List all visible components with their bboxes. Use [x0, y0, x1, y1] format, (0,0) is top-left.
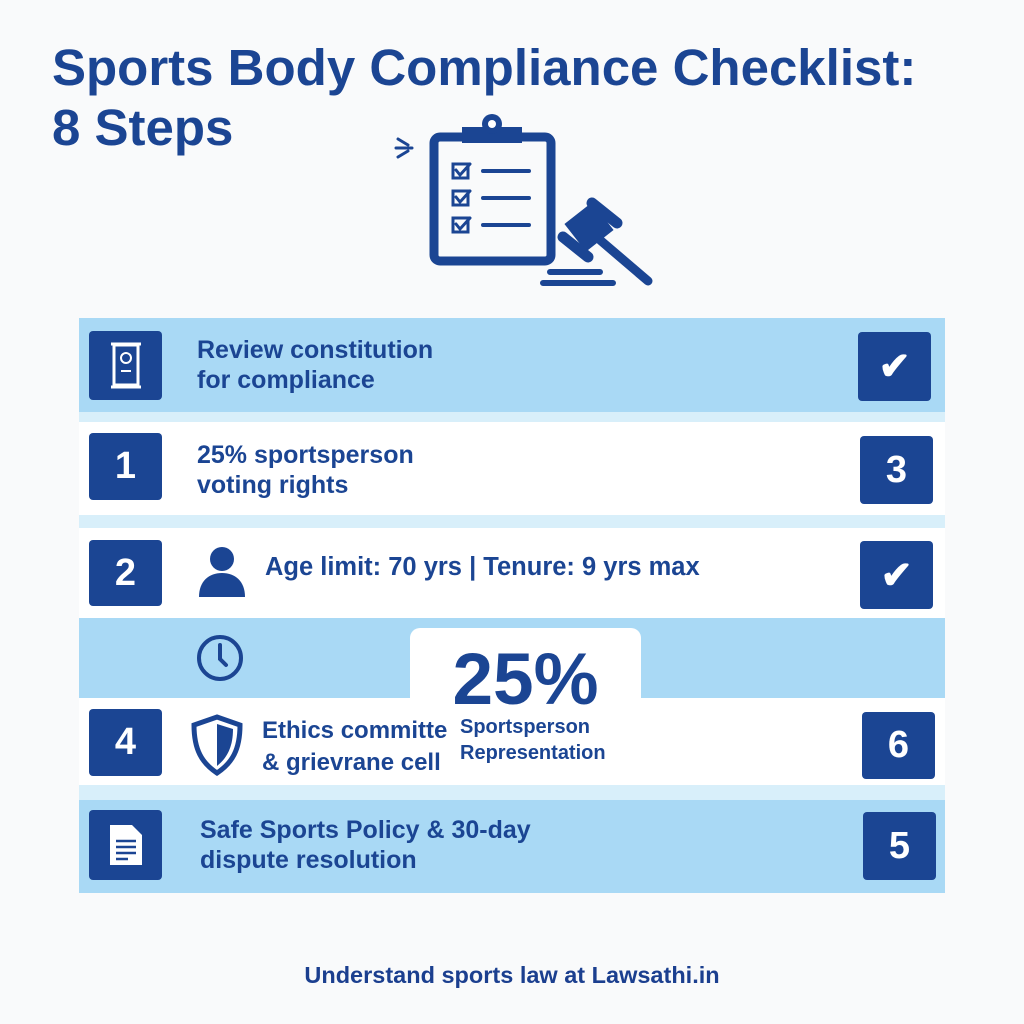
icon: person: [199, 547, 245, 597]
step 1: 1: [115, 445, 136, 487]
callout: 25% representation: Representation: [460, 742, 606, 764]
text: safe sports: Safe Sports Policy & 30-day: [200, 816, 531, 844]
step 4: 4: [115, 721, 136, 763]
callout: 25% representation: 25%: [452, 639, 599, 720]
title: 8 Steps: [52, 99, 233, 156]
step 2: 2: [115, 552, 136, 594]
step 6: 6: [888, 724, 909, 766]
icon: document: [89, 810, 162, 880]
icon: constitution document: [89, 331, 162, 400]
footer: Understand sports law at Lawsathi.in: [304, 962, 720, 988]
text: safe sports: [200, 816, 531, 874]
icon: clock: [197, 635, 243, 681]
step 1: [89, 433, 162, 500]
step 6: [862, 712, 935, 779]
text: voting rights: 25% sportsperson: [197, 441, 414, 469]
icon: check 2: ✔: [881, 554, 912, 596]
text: review constitution: Review constitution: [197, 336, 433, 364]
text: review constitution: [197, 336, 433, 394]
icon: check 1: ✔: [879, 346, 910, 388]
icon: check 1: [858, 332, 931, 401]
title: [52, 39, 916, 156]
icon: clipboard and gavel: [394, 114, 652, 286]
text: safe sports: dispute resolution: [200, 846, 417, 874]
callout: 25% representation: [410, 628, 641, 768]
step 5: [863, 812, 936, 880]
text: ethics: & grievrane cell: [262, 749, 441, 776]
text: review constitution: for compliance: [197, 366, 375, 394]
text: ethics: Ethics committe: [262, 717, 447, 744]
text: voting rights: voting rights: [197, 471, 348, 499]
icon: shield: [192, 714, 242, 776]
step 2: [89, 540, 162, 606]
text: age limit: Age limit: 70 yrs | Tenure: 9 yrs max: [265, 553, 700, 581]
step 5: 5: [889, 824, 910, 866]
step 3: 3: [886, 448, 907, 490]
callout: 25% representation: Sportsperson: [460, 716, 590, 738]
step 3: [860, 436, 933, 504]
title: Sports Body Compliance Checklist:: [52, 39, 916, 96]
text: ethics: [262, 717, 447, 776]
step 4: [89, 709, 162, 776]
icon: check 2: [860, 541, 933, 609]
text: voting rights: [197, 441, 414, 499]
